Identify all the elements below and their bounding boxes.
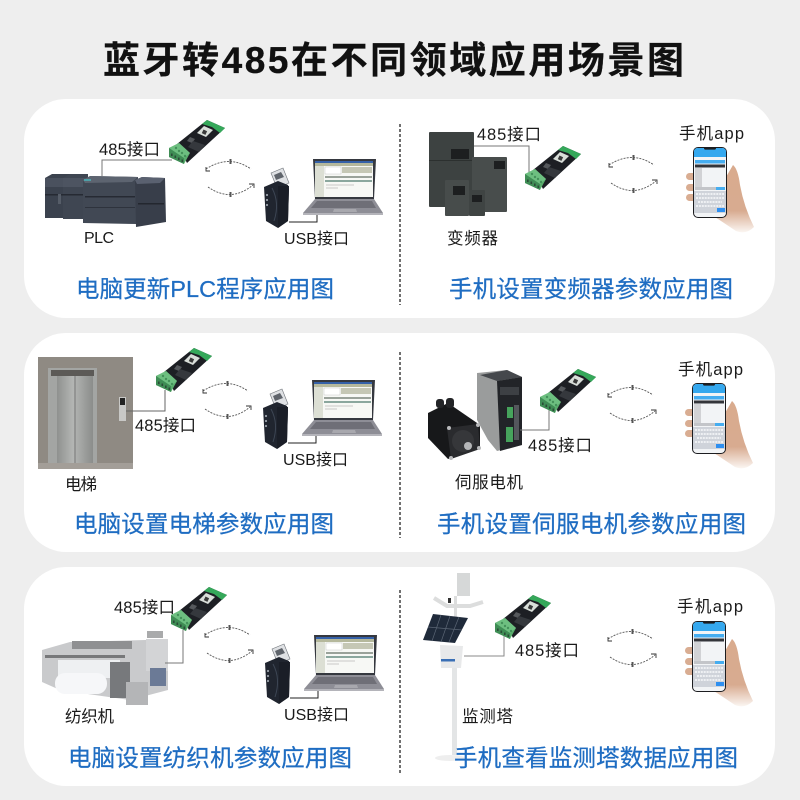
title: 蓝牙转485在不同领域应用场景图 [103, 40, 684, 81]
icon: bluetooth module [525, 146, 581, 190]
icon: wireless arrows [608, 629, 656, 667]
icon: wireless arrows [609, 155, 657, 193]
icon: bluetooth module [171, 587, 227, 631]
icon: bluetooth module [540, 369, 596, 413]
icon: bluetooth module [156, 348, 212, 392]
label: mobile app: 手机app [679, 124, 744, 143]
icon: USB dongle and laptop [265, 635, 384, 704]
label: 485 interface: 485接口 [515, 641, 579, 660]
icon: phone in hand [685, 621, 753, 706]
panel: row 2 [24, 333, 775, 552]
label: 485 interface: 485接口 [114, 598, 175, 617]
icon: wireless arrows [205, 625, 253, 663]
icon: servo motor and driver [428, 370, 522, 460]
icon: wireless arrows [608, 385, 656, 423]
label: 485 interface: 485接口 [477, 125, 541, 144]
label: USB interface: USB接口 [283, 451, 348, 469]
icon: wireless arrows [206, 159, 254, 197]
label: 485 interface: 485接口 [99, 140, 160, 159]
panel: row 1 [24, 99, 775, 318]
label: mobile app: 手机app [677, 597, 743, 616]
icon: textile loom [42, 631, 168, 705]
icon: phone in hand [685, 383, 753, 468]
icon: elevator [38, 357, 133, 469]
icon: USB dongle and laptop [264, 159, 383, 228]
caption: PLC: 电脑更新PLC程序应用图 [76, 276, 334, 302]
label: tower: 监测塔 [462, 707, 514, 726]
icon: wireless arrows [203, 381, 251, 419]
label: USB interface: USB接口 [284, 230, 349, 248]
connection line: inverter to module [473, 146, 529, 173]
caption: loom: 电脑设置纺织机参数应用图 [68, 745, 352, 771]
connection line: elevator to module [126, 390, 165, 411]
caption: tower: 手机查看监测塔数据应用图 [454, 745, 738, 771]
icon: monitoring tower [423, 573, 483, 761]
connection line: tower to module [464, 635, 504, 656]
label: inverter: 变频器 [447, 229, 498, 248]
label: elevator: 电梯 [65, 475, 97, 494]
label: 485 interface: 485接口 [528, 436, 592, 455]
label: 485 interface: 485接口 [135, 416, 196, 435]
connection line: driver to module [520, 410, 549, 430]
label: loom: 纺织机 [65, 707, 114, 726]
icon: bluetooth module [169, 120, 225, 164]
label: servo motor: 伺服电机 [455, 473, 524, 492]
caption: elevator: 电脑设置电梯参数应用图 [74, 511, 334, 537]
panel: row 3 [24, 567, 775, 786]
icon: bluetooth module [495, 595, 551, 639]
connection line: loom to module [165, 630, 183, 663]
icon: frequency inverters [429, 132, 507, 216]
caption: servo: 手机设置伺服电机参数应用图 [437, 511, 746, 537]
caption: inverter: 手机设置变频器参数应用图 [449, 276, 733, 302]
connection line: PLC to module [102, 160, 172, 176]
icon: USB dongle and laptop [263, 380, 382, 449]
label: USB interface: USB接口 [284, 706, 349, 724]
icon: phone in hand [686, 147, 754, 232]
label: mobile app: 手机app [678, 360, 743, 379]
label: PLC: PLC [84, 230, 114, 247]
icon: PLC [45, 174, 166, 227]
